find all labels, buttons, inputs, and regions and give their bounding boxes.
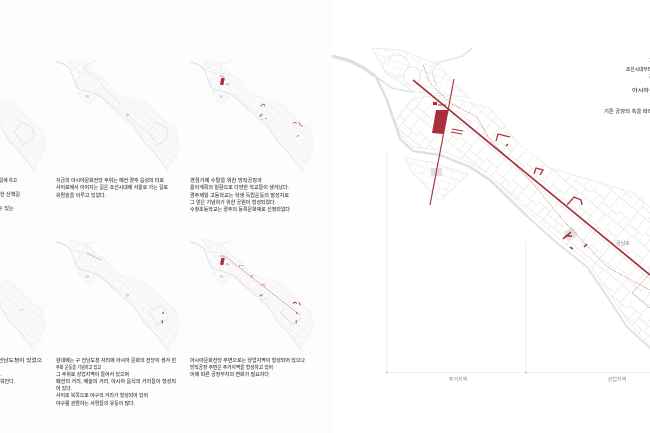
text: bottom 2 description xyxy=(56,357,176,407)
text: bottom 2 description: 야구를 관람하는 사람들의 유동이 많다. xyxy=(56,400,135,407)
factory footprints xyxy=(432,102,463,134)
panel: small map top 3 xyxy=(190,59,314,213)
main diagonal axis xyxy=(413,80,650,275)
dashed historic route xyxy=(423,65,650,333)
text: bottom 3 description xyxy=(190,357,305,378)
panel: small map bottom 1 xyxy=(0,239,46,385)
text: bottom 2 description: 그 주위로 상업지역이 들어서 있으며 xyxy=(56,371,129,378)
panel: small map bottom 2 xyxy=(56,239,180,407)
text: top 2 description: 사이로에서 이어지는 길은 조선시대에 서울로 가는 길로 xyxy=(56,184,168,191)
panel: small map bottom 3 xyxy=(190,239,314,378)
text: bottom 2 description: 어 있다. xyxy=(56,385,72,392)
zone label: residential: 주거지역 xyxy=(449,376,467,383)
text: top 3 description: 경점기에 수탈을 위한 방직공장과 xyxy=(190,177,262,184)
text: bottom 2 description: 주화 운동을 기념하고 있고 xyxy=(56,364,101,371)
text: top 3 description xyxy=(190,177,290,213)
text: top 2 description: 지금의 아시아문화전당 주위는 예전 광주 읍성의 터로 xyxy=(56,177,164,184)
background panel: right large map sheet xyxy=(332,0,650,433)
panel frames: small map sheets xyxy=(42,45,310,355)
text: bottom 3 description: 이에 따른 공장부지의 변화가 필요하다 xyxy=(190,371,269,378)
road label: 금남로 xyxy=(616,240,630,247)
text: top 3 description: 율이계획의 일환으로 다양한 학교들이 생겨났다. xyxy=(190,184,289,191)
crossing axis xyxy=(430,79,454,205)
zone label: commercial: 상업지역 xyxy=(608,376,626,383)
panel: small map top 1 xyxy=(0,59,46,212)
text: top 2 description: 유람숲을 이루고 있었다. xyxy=(56,192,106,199)
text: bottom 3 description: 방직공장 주변은 주거지역을 형성하고 있어 xyxy=(190,364,273,371)
text: bottom 3 description: 아시아문화전당 주변으로는 상업지역이 형성되어 있으나 xyxy=(190,357,305,364)
text: bottom 2 description: 사이로 북쪽으로 야구의 거리가 형성되어 있어 xyxy=(56,392,148,399)
zone axis lines xyxy=(386,151,650,374)
text: top 3 description: 그 앞은 기념하기 위한 공원이 형성되었다. xyxy=(190,199,276,206)
text: top 1 description xyxy=(0,177,20,212)
factory fragments along axis xyxy=(496,134,587,249)
panel: large site map xyxy=(332,48,650,421)
base map: river and streets xyxy=(332,48,650,421)
text: top 3 description: 수창초등학교는 광주의 등록문화재로 선정되었다 xyxy=(190,206,290,213)
text: bottom 2 description: 현대에는 구 전남도청 자리에 아시아 문화의 전당이 생겨 민 xyxy=(56,357,176,364)
text: top 2 description xyxy=(56,177,168,199)
text: top 3 description: 광주제일 고등학교는 학생 독립운동의 발상지로 xyxy=(190,192,289,199)
text: bottom 2 description: 패션의 거리, 예술의 거리, 아시아 음식의 거리들이 형성되 xyxy=(56,378,176,385)
panel: small map top 2 xyxy=(56,59,180,199)
annotation text xyxy=(604,58,650,115)
text: bottom 1 description xyxy=(0,357,42,385)
